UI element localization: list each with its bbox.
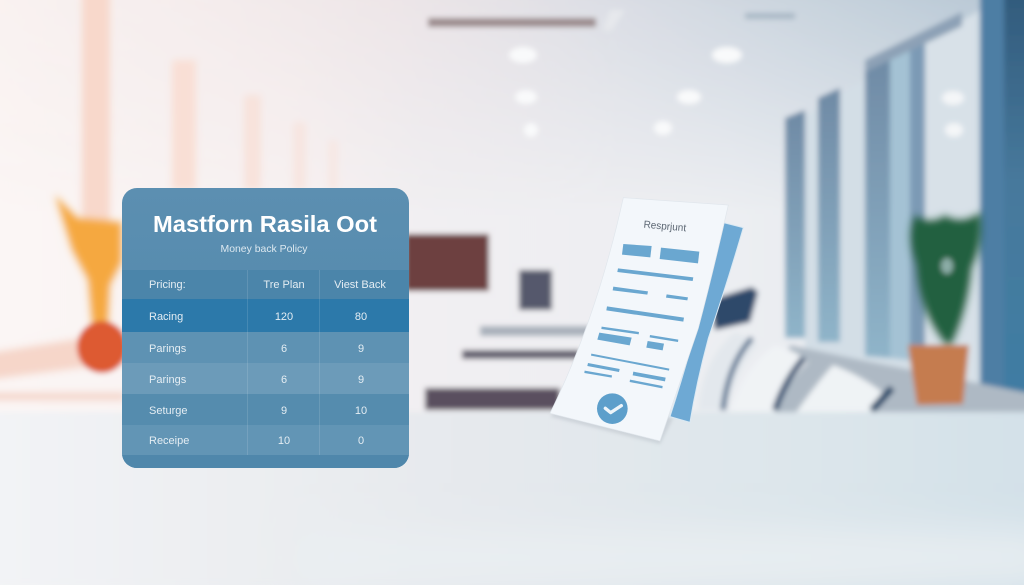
title: Mastforn Rasila Oot <box>153 211 377 237</box>
table text: Parings <box>149 343 187 355</box>
table text: 6 <box>281 343 287 355</box>
subtitle: Money back Policy <box>220 243 308 255</box>
table text: Tre Plan <box>263 279 305 291</box>
table text: 120 <box>275 311 293 323</box>
table text: 80 <box>355 311 367 323</box>
table text <box>149 279 386 447</box>
table text: 9 <box>358 374 364 386</box>
table text: Seturge <box>149 405 188 417</box>
table highlight <box>724 530 1024 585</box>
table row bands <box>122 270 409 468</box>
receipt illustration <box>550 198 743 444</box>
table text: 6 <box>281 374 287 386</box>
receipt lines <box>584 244 699 388</box>
table text: 0 <box>358 435 364 447</box>
panel: pricing table <box>122 188 409 468</box>
soft shadow <box>550 398 673 444</box>
panel background <box>122 188 409 468</box>
table text: Racing <box>149 311 183 323</box>
table text: Receipe <box>149 435 189 447</box>
table text: Pricing: <box>149 279 186 291</box>
right plant <box>908 212 981 405</box>
table text: 10 <box>355 405 367 417</box>
table text: Parings <box>149 374 187 386</box>
table text: 10 <box>278 435 290 447</box>
reflected lights in window <box>942 91 964 137</box>
chairs <box>698 287 892 414</box>
icon: check badge <box>597 393 628 424</box>
receipt heading: Resprjunt <box>643 220 687 234</box>
base table tone <box>0 412 1024 585</box>
back sheet <box>670 222 743 422</box>
left pillars <box>82 0 338 230</box>
window ledge <box>760 345 1024 415</box>
ceiling <box>428 10 795 137</box>
receipt sheet <box>550 198 728 441</box>
table text: 9 <box>281 405 287 417</box>
table surface <box>0 412 1024 585</box>
table text: 9 <box>358 343 364 355</box>
monitors and desk <box>405 234 600 410</box>
table text: Viest Back <box>334 279 386 291</box>
left floor bands <box>0 337 125 400</box>
orange plant <box>55 195 127 373</box>
right windows <box>785 0 1024 400</box>
